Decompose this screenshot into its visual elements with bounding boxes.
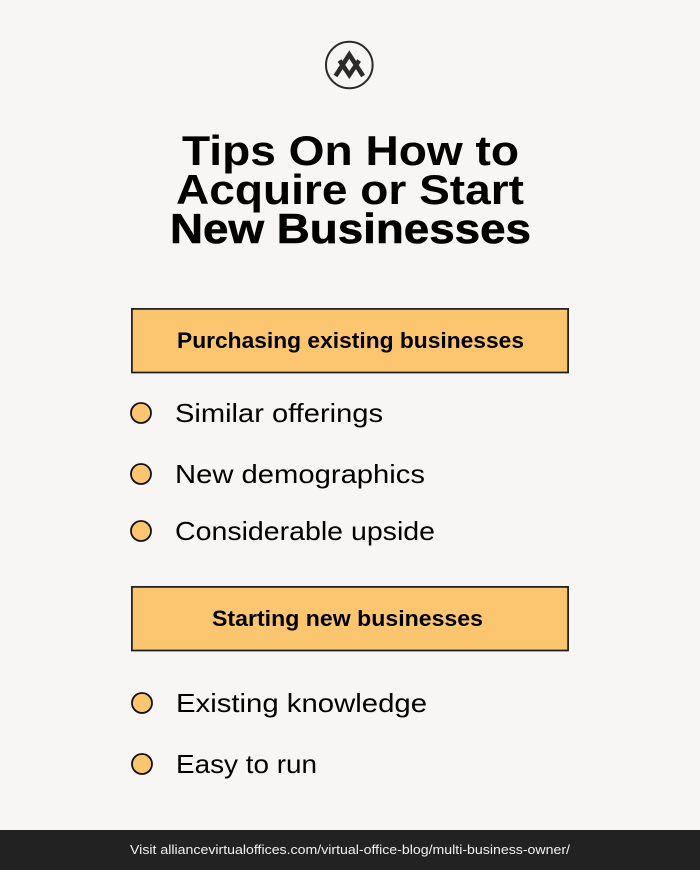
panel: purchasing existing businesses heading: Purchasing existing businesses <box>177 328 524 353</box>
footer bar with source link: Visit alliancevirtualoffices.com/virtual-office-blog/multi-business-owner/ <box>130 842 570 857</box>
panel: purchasing existing businesses heading <box>132 309 568 372</box>
icon: mountain logo <box>326 42 373 88</box>
panel: starting new businesses heading: Starting new businesses <box>212 606 483 631</box>
panel: starting new businesses heading <box>132 587 568 650</box>
bullet: new demographics: New demographics <box>175 459 425 489</box>
title: Acquire or Start <box>176 166 524 213</box>
title: New Businesses <box>170 205 531 252</box>
footer bar with source link <box>0 830 700 870</box>
bullet: considerable upside: Considerable upside <box>175 516 435 546</box>
bullet: easy to run: Easy to run <box>176 749 317 779</box>
list: purchasing existing businesses items <box>131 398 435 546</box>
title: Tips On How to <box>182 127 519 174</box>
title <box>170 127 531 252</box>
list: starting new businesses items <box>132 688 427 779</box>
bullet: existing knowledge: Existing knowledge <box>176 688 427 718</box>
bullet: similar offerings: Similar offerings <box>175 398 383 428</box>
